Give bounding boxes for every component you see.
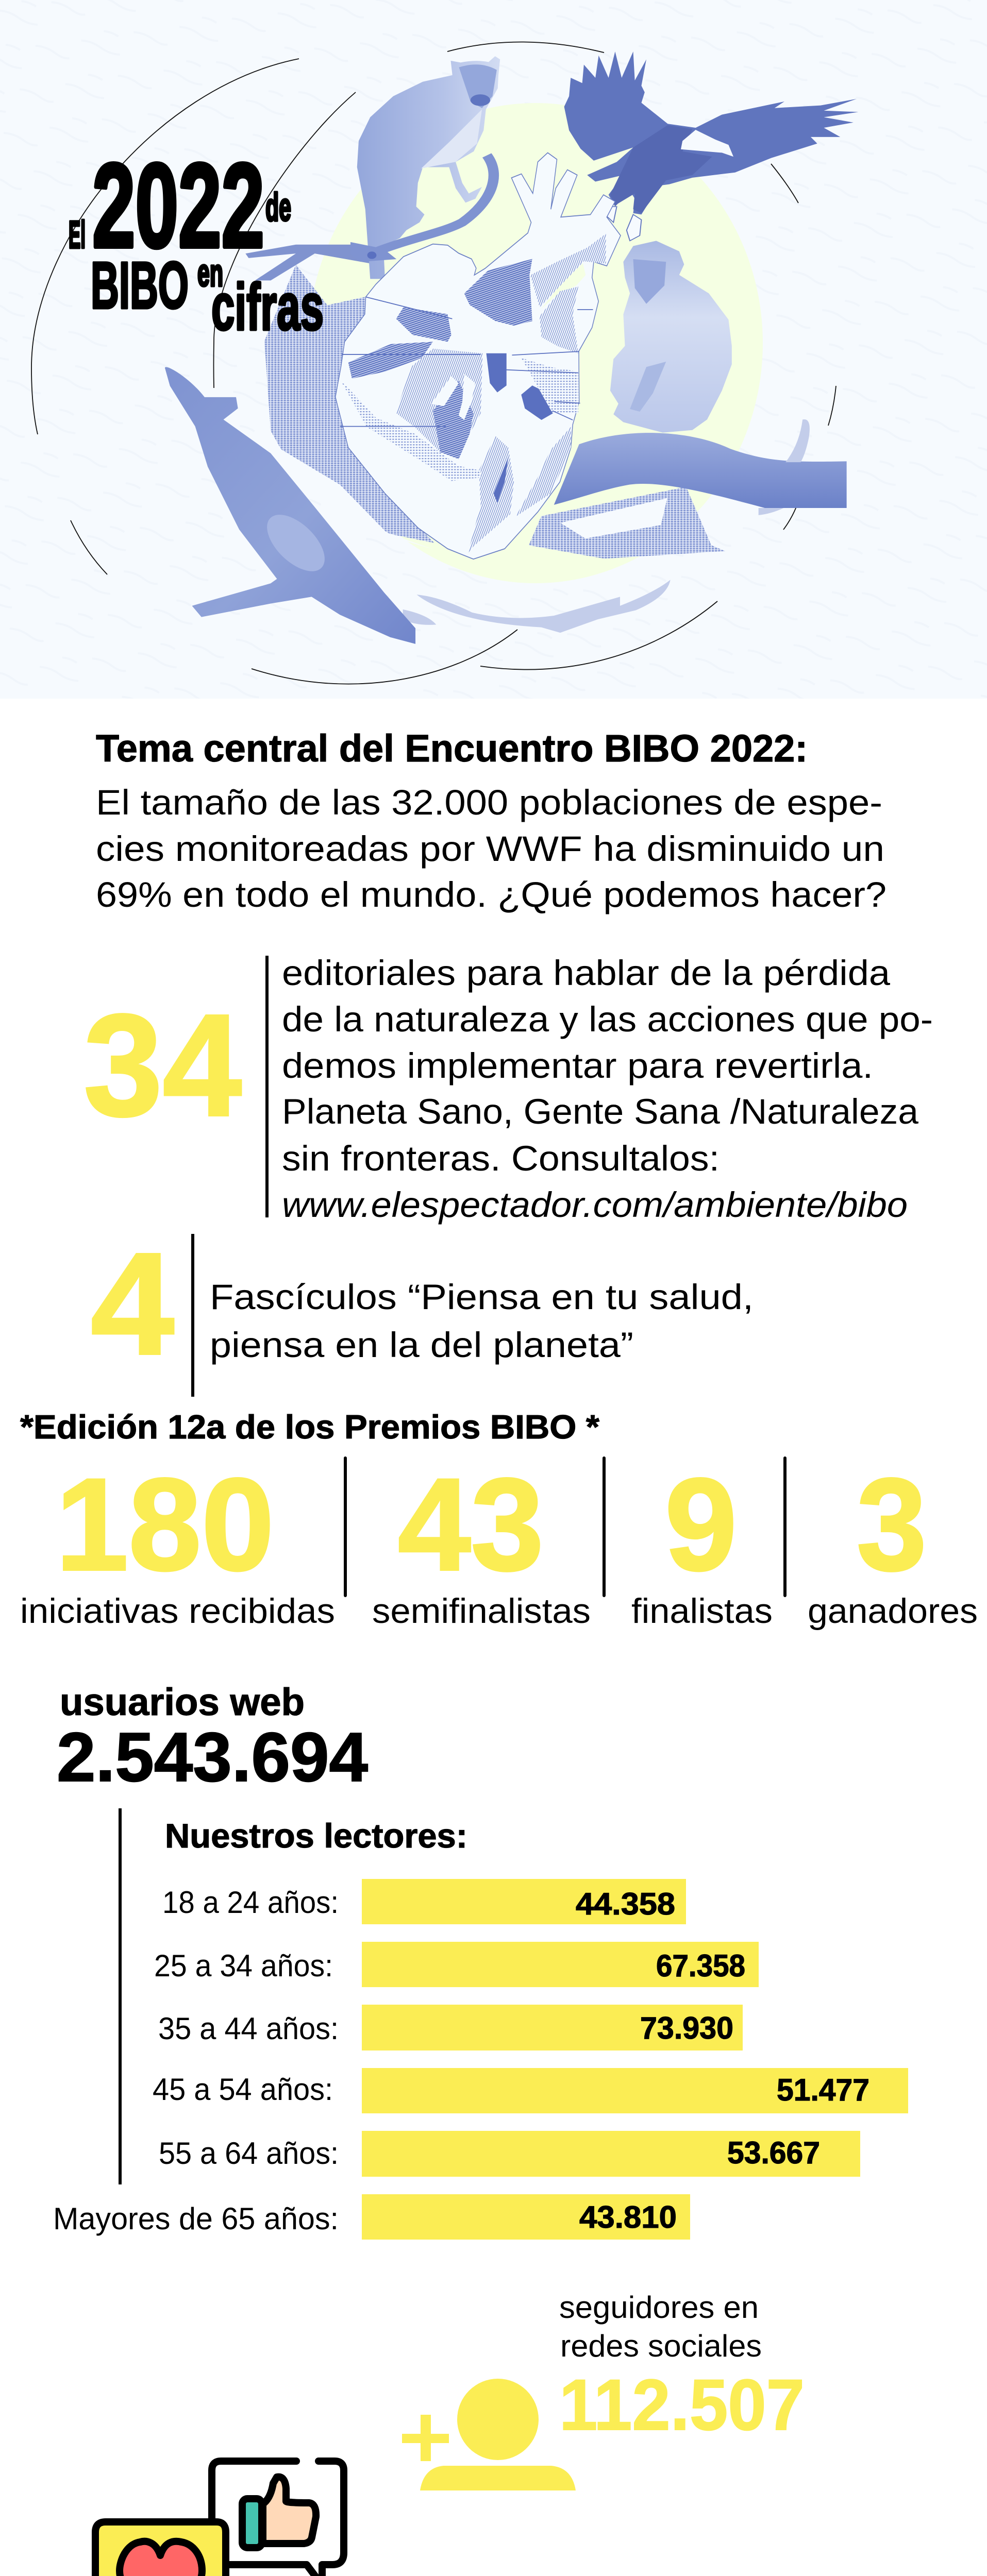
bar: mayores de 65 años: 43.810 (579, 2200, 677, 2234)
number: 112.507: 112.507 (559, 2364, 805, 2445)
bar: 25 a 34 años: 67.358 (656, 1948, 745, 1983)
title: El 2022 de BIBO en cifras: 2022 (92, 139, 264, 273)
bar: 25 a 34 años (154, 1942, 759, 1987)
heart: papillary muscles (431, 374, 475, 420)
text: fascículos: piensa en la del planeta” (210, 1325, 633, 1365)
heart: aortic window (541, 263, 585, 310)
paragraph: tema central: 69% en todo el mundo. ¿Qué podemos hacer? (96, 875, 886, 914)
bar: 35 a 44 años: 35 a 44 años: (158, 2011, 339, 2046)
stat: 9 finalistas (631, 1451, 773, 1631)
bar: 18 a 24 años: 18 a 24 años: (162, 1885, 339, 1920)
heart: shaded chambers (341, 234, 606, 553)
text: fascículos (210, 1277, 754, 1365)
text: editoriales: editoriales para hablar de la pérdida (282, 953, 891, 993)
stat: 34 editoriales (83, 953, 933, 1225)
bar: 55 a 64 años: 55 a 64 años: (159, 2136, 339, 2171)
title: El 2022 de BIBO en cifras: BIBO (91, 249, 189, 323)
section: premios BIBO (20, 1408, 978, 1631)
text: editoriales: demos implementar para revertirla. (282, 1046, 873, 1086)
icon: social media chat bubbles (95, 2461, 344, 2576)
stat: 3 ganadores: 3 (857, 1451, 927, 1598)
stat: 180 iniciativas recibidas: iniciativas recibidas (20, 1591, 335, 1631)
title: El 2022 de BIBO en cifras: cifras (211, 270, 324, 344)
text: fascículos: Fascículos “Piensa en tu salud, (210, 1277, 754, 1317)
bar: 25 a 34 años: 25 a 34 años: (154, 1948, 333, 1983)
illustration: eagle (564, 52, 858, 241)
illustration: branch under monkey (554, 433, 847, 508)
bar: 35 a 44 años (158, 2005, 743, 2050)
title: El 2022 de BIBO en cifras (69, 139, 324, 344)
heading: edición 12a: *Edición 12a de los Premios BIBO * (20, 1408, 600, 1446)
text: editoriales: sin fronteras. Consultalos: (282, 1139, 720, 1178)
bar: 18 a 24 años (162, 1879, 686, 1924)
text: editoriales: www.elespectador.com/ambiente/bibo (282, 1185, 908, 1225)
text: editoriales: de la naturaleza y las acciones que po- (282, 999, 933, 1039)
stat: 3 ganadores: ganadores (808, 1591, 978, 1631)
bar: 45 a 54 años (153, 2068, 908, 2113)
illustration: puma (350, 56, 500, 279)
illustration: mountains (264, 265, 725, 558)
stat: 43 semifinalistas (372, 1451, 591, 1631)
text: seguidores (559, 2290, 762, 2363)
pale yellow circle (308, 103, 763, 583)
stat: 9 finalistas: finalistas (631, 1591, 773, 1631)
heart: pointer lines (340, 297, 593, 427)
number: 34: 34 (83, 984, 243, 1146)
text: editoriales: Planeta Sano, Gente Sana /Naturaleza (282, 1092, 919, 1131)
panel: hero illustration (0, 0, 987, 699)
stat: 9 finalistas: 9 (665, 1451, 737, 1598)
paragraph: tema central: El tamaño de las 32.000 poblaciones de espe- (96, 783, 882, 822)
text: seguidores: redes sociales (560, 2329, 762, 2363)
illustration: whale (165, 367, 415, 644)
stat: 43 semifinalistas: semifinalistas (372, 1591, 591, 1631)
icon: person plus (402, 2379, 576, 2490)
stat: 4 fascículos (91, 1223, 754, 1397)
text: editoriales (282, 953, 933, 1225)
illustration: pale brush strokes (403, 419, 810, 633)
title: El 2022 de BIBO en cifras: de (265, 185, 291, 229)
paragraph: tema central: cies monitoreadas por WWF ha disminuido un (96, 829, 884, 869)
number: 4: 4 (91, 1223, 175, 1385)
decorative arcs (31, 42, 836, 684)
stat: usuarios web: usuarios web (60, 1681, 305, 1723)
illustration: monkey (610, 241, 732, 433)
stat: seguidores en redes sociales (402, 2290, 805, 2490)
stat: usuarios web (57, 1681, 368, 1796)
illustration: lower branch (245, 245, 378, 280)
stat: 180 iniciativas recibidas (20, 1451, 335, 1631)
title: El 2022 de BIBO en cifras: en (197, 251, 223, 294)
text: seguidores: seguidores en (559, 2290, 759, 2325)
bar: mayores de 65 años: Mayores de 65 años: (53, 2201, 339, 2236)
heading: tema central: Tema central del Encuentro BIBO 2022: (96, 727, 808, 770)
paragraph: tema central (96, 783, 886, 914)
stat: 3 ganadores (808, 1451, 978, 1631)
bar: 55 a 64 años (159, 2131, 860, 2177)
heading: nuestros lectores: Nuestros lectores: (165, 1817, 467, 1855)
icon: heart bubble (95, 2522, 226, 2576)
bar chart: nuestros lectores (53, 1808, 908, 2240)
stat: 180 iniciativas recibidas: 180 (56, 1451, 274, 1598)
icon: thumbs up bubble (212, 2461, 344, 2576)
bar: 55 a 64 años: 53.667 (727, 2136, 820, 2170)
bar: mayores de 65 años (53, 2194, 690, 2240)
illustration: heart (336, 152, 621, 559)
stat: 43 semifinalistas: 43 (398, 1451, 544, 1598)
stat: usuarios web: 2.543.694 (57, 1718, 368, 1796)
bar: 18 a 24 años: 44.358 (576, 1887, 675, 1921)
bar: 35 a 44 años: 73.930 (640, 2011, 733, 2045)
text block: tema central (96, 727, 886, 914)
title: El 2022 de BIBO en cifras: El (69, 213, 86, 256)
bar: 45 a 54 años: 51.477 (777, 2073, 869, 2107)
bar: 45 a 54 años: 45 a 54 años: (153, 2072, 333, 2107)
